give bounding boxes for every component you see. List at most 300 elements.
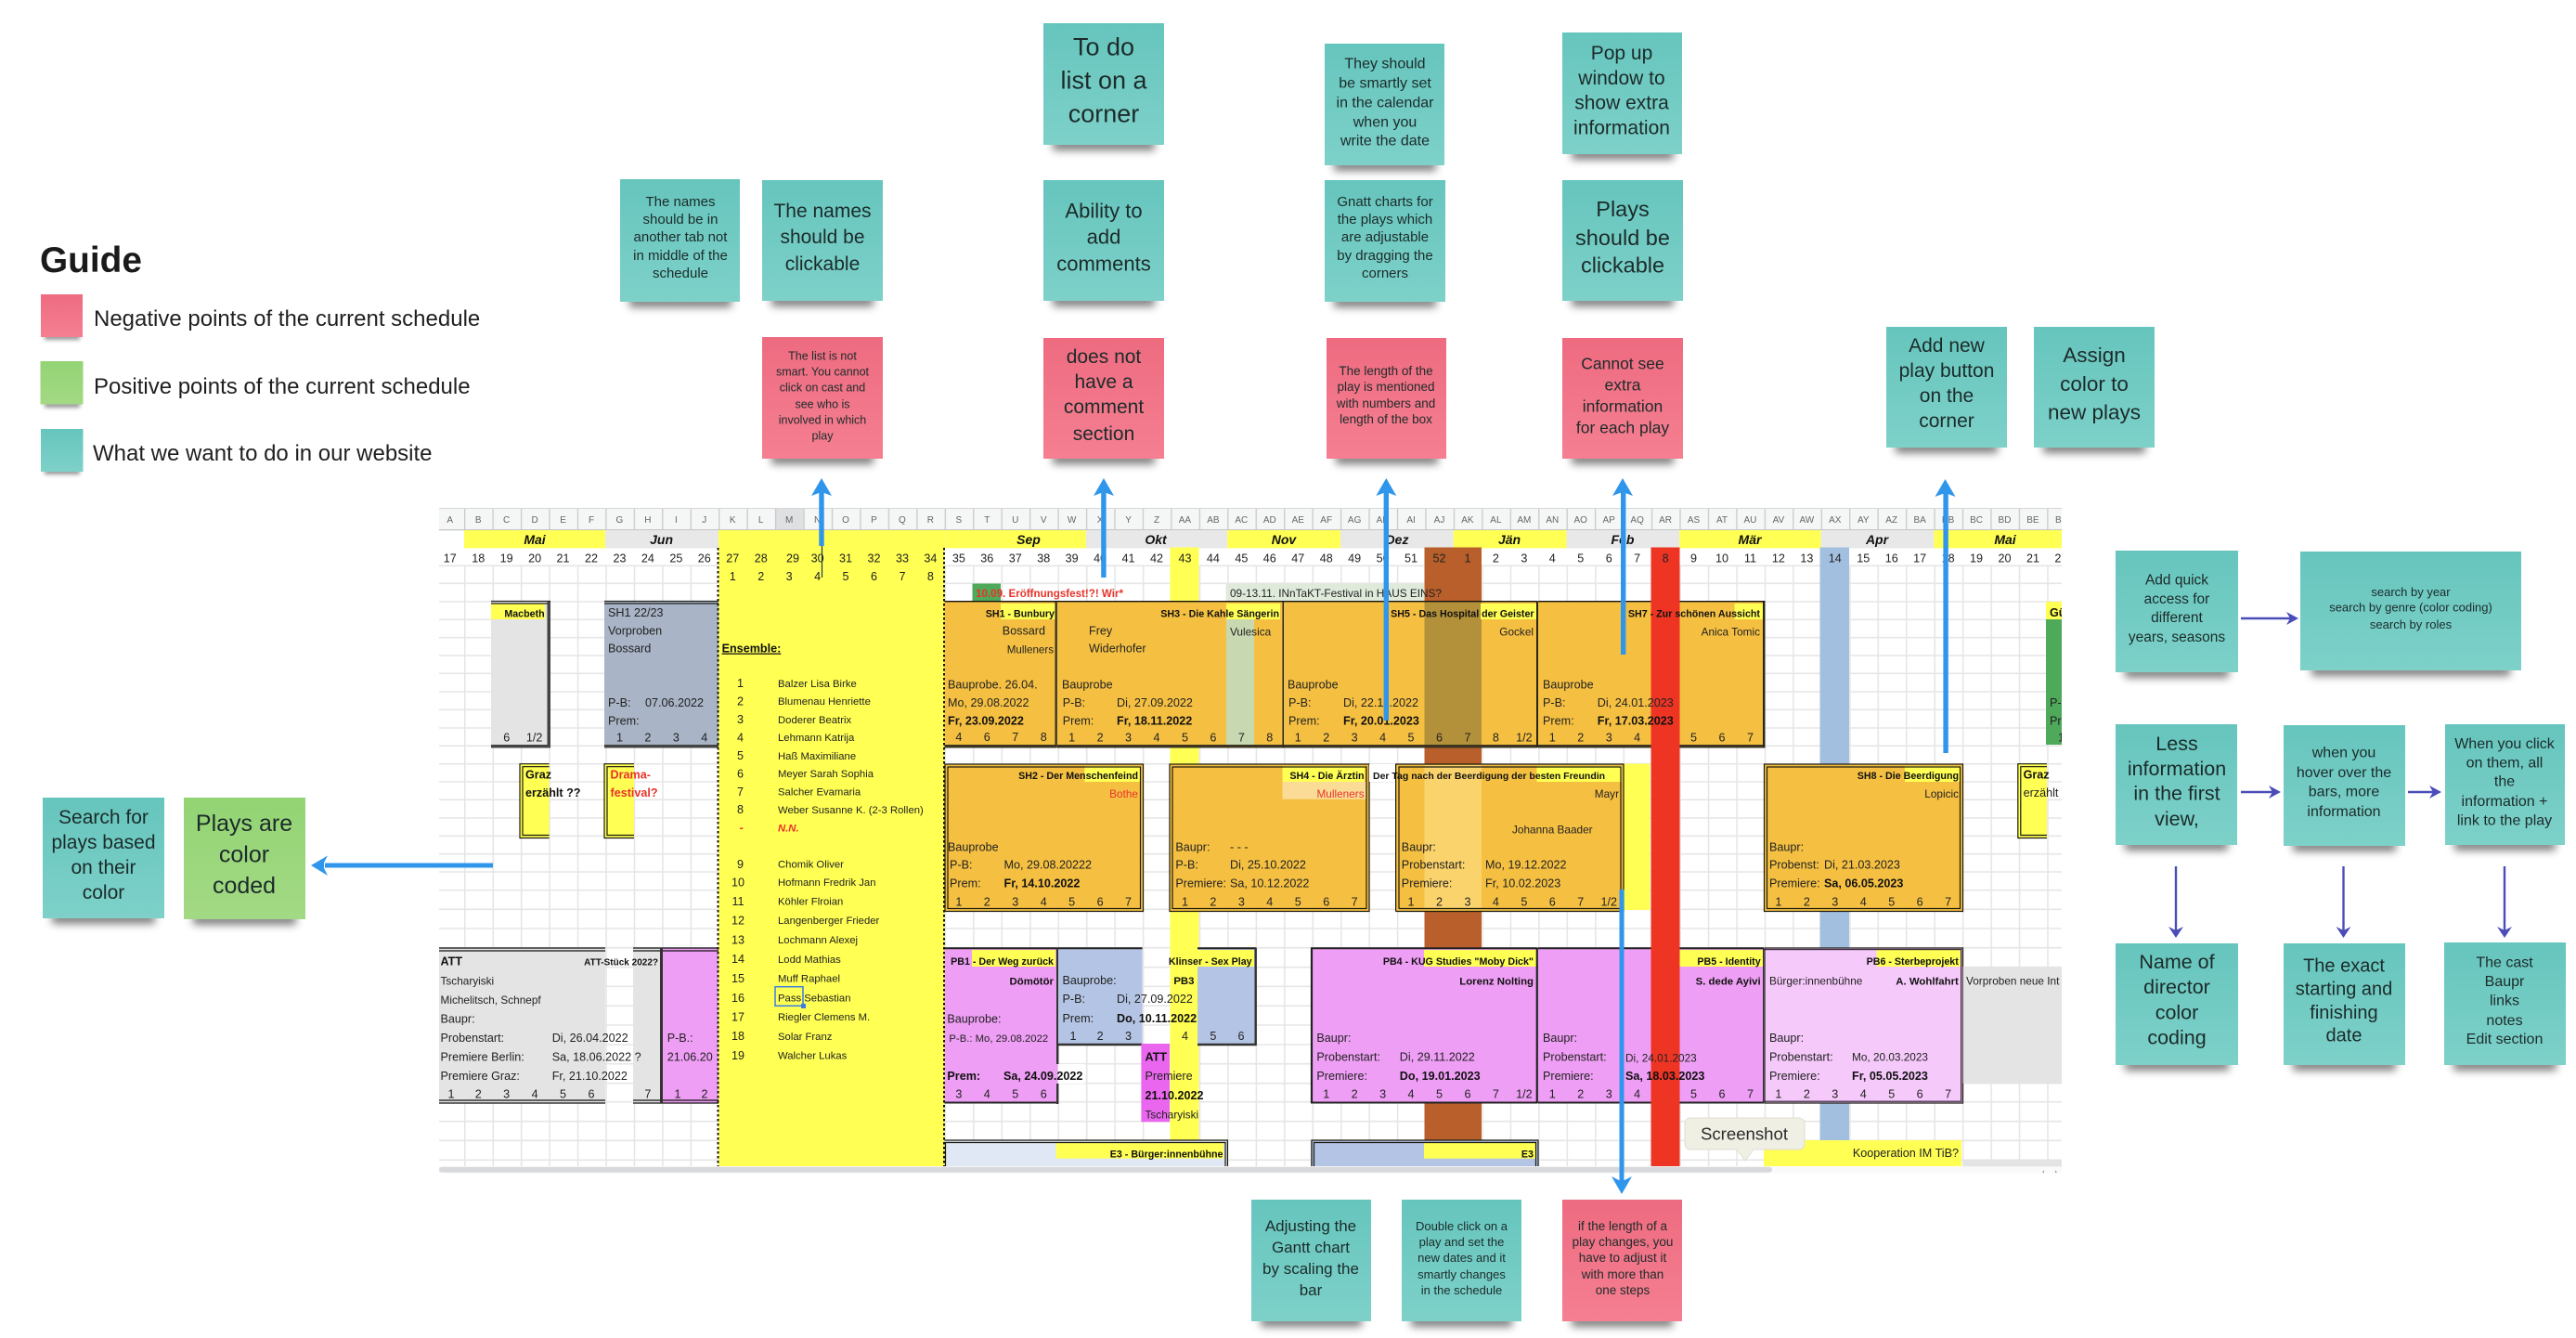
sticky: cast baupr links: Edit section	[2466, 1032, 2543, 1047]
ensemble cast list: Ensemble:	[722, 643, 781, 656]
box: pink P-B column: 1	[674, 1088, 681, 1101]
sticky: smartly set in calendar: be smartly set	[1339, 76, 1431, 91]
box: SH3 Die Kahle Sängerin: 4	[1153, 732, 1160, 745]
box: SH5 Das Hospital der Geister: Fr, 20.01.2023	[1343, 715, 1419, 728]
box: SH3 Die Kahle Sängerin: Di, 27.09.2022	[1117, 696, 1193, 709]
week numbers row: 3	[1521, 552, 1527, 565]
box: SH2 Der Menschenfeind: P-B:	[950, 858, 973, 871]
week numbers row: 20	[528, 552, 541, 565]
box: Vorproben neue Intendanz grey	[1963, 967, 2062, 1084]
box: PB6 Sterbeprojekt: PB6 - Sterbeprojekt	[1867, 956, 1959, 968]
box: SH8 Die Beerdigung: 6	[1917, 895, 1923, 908]
SH7 box text: 7	[1747, 732, 1754, 745]
box: Graz erzählt	[520, 764, 580, 838]
PB5 box text: Probenstart:	[1543, 1051, 1607, 1064]
box: Macbeth: 6	[503, 732, 510, 745]
legend	[40, 240, 480, 474]
box: PB4 KUG Studies Moby Dick: 7	[1493, 1088, 1499, 1101]
sticky: search by color: Search for	[58, 807, 149, 828]
box: ATT grey: 2	[475, 1088, 482, 1101]
box: PB3 Klinser Sex Play: PB3	[1173, 976, 1194, 987]
ensemble cast list: N.N.	[778, 823, 799, 834]
box: PB6 Sterbeprojekt: 1	[1775, 1088, 1781, 1101]
arrow: up to add new play sticky	[1935, 479, 1955, 753]
box: SH8 Die Beerdigung: Probenst:	[1769, 858, 1819, 871]
week numbers row: 46	[1263, 552, 1276, 565]
sticky: quick access: access for	[2144, 591, 2209, 607]
sticky: names clickable: clickable	[785, 253, 860, 275]
box: pink P-B column	[660, 948, 718, 1103]
ensemble cast list: 8	[927, 570, 934, 583]
box: PB6 Sterbeprojekt: Premiere:	[1769, 1070, 1820, 1083]
ensemble cast list: 12	[731, 914, 744, 927]
sticky: smartly set in calendar: write the date	[1340, 134, 1430, 149]
week numbers row: 40	[1094, 552, 1107, 565]
legend swatch: website	[41, 429, 84, 474]
sticky: smartly set in calendar: when you	[1353, 115, 1417, 130]
box: PB1 Der Weg zurück: P-B.: Mo, 29.08.2022	[949, 1033, 1048, 1045]
box: SH4 Die Ärztin: - - -	[1230, 841, 1249, 854]
box: ATT grey: Di, 26.04.2022	[552, 1032, 628, 1045]
sticky: names clickable: The names	[773, 201, 872, 222]
sticky: plays clickable: should be	[1575, 226, 1670, 250]
box: SH8 Die Beerdigung: 1	[1775, 895, 1781, 908]
sticky: no comment section	[1043, 338, 1164, 464]
column letters header: O	[842, 515, 849, 526]
column letters header: AB	[1207, 515, 1220, 526]
arrow: hover to click	[2408, 786, 2441, 799]
week numbers row: 14	[1829, 552, 1842, 565]
ensemble cast list: Lochmann Alexej	[778, 935, 858, 946]
ensemble cast list: 7	[737, 786, 744, 799]
box: PB4 KUG Studies Moby Dick: 5	[1436, 1088, 1443, 1101]
SH7 box text: 1	[1549, 732, 1556, 745]
sticky: name of director: Name of	[2139, 951, 2215, 973]
box: SH5 Das Hospital der Geister: P-B:	[1288, 696, 1311, 709]
ensemble cast list: Lodd Mathias	[778, 955, 841, 966]
legend swatch: negative	[41, 294, 83, 340]
week numbers row: 44	[1207, 552, 1220, 565]
sticky: to do list: list on a	[1060, 67, 1148, 95]
month header row: Mai	[524, 532, 547, 547]
ensemble cast list: 8	[737, 803, 744, 816]
week numbers row: 43	[1178, 552, 1191, 565]
box: PB6 Sterbeprojekt: 6	[1917, 1088, 1923, 1101]
PB5 box text: Premiere:	[1543, 1070, 1594, 1083]
week numbers row: 52	[1432, 552, 1446, 565]
box: ATT grey: 4	[532, 1088, 538, 1101]
box: ATT grey: ATT-Stück 2022?	[584, 958, 658, 968]
SH7 box text: Prem:	[1543, 715, 1574, 728]
sticky: search by color: on their	[71, 857, 136, 878]
box: ATT Premiere: Tscharyiski	[1146, 1109, 1198, 1122]
SH7 box text: Anica Tomic	[1702, 626, 1760, 639]
column letters header: AW	[1799, 515, 1815, 526]
box: SH5 Das Hospital der Geister: 8	[1493, 732, 1499, 745]
month header row: Jun	[650, 532, 673, 547]
column letters header: AZ	[1885, 515, 1897, 526]
box: PB3 Klinser Sex Play	[1058, 948, 1257, 1046]
SH7 box text: 6	[1718, 732, 1726, 745]
sticky: gantt charts: the plays which	[1338, 212, 1432, 227]
box: PB6 Sterbeprojekt: 7	[1945, 1088, 1951, 1101]
PB5 box text	[1543, 956, 1761, 1101]
column letters header: AN	[1546, 515, 1559, 526]
box: SH2 Der Menschenfeind	[945, 764, 1144, 912]
box: PB4 KUG Studies Moby Dick: Premiere:	[1316, 1070, 1367, 1083]
column letters header: Z	[1154, 515, 1159, 526]
sticky: less information: information	[2128, 758, 2226, 780]
sticky: names in another tab: schedule	[653, 266, 708, 281]
box: SH8 Die Beerdigung: Lopicic	[1924, 787, 1959, 800]
red week column	[1650, 548, 1680, 1166]
week numbers row: 15	[1857, 552, 1870, 565]
sticky: less information	[2116, 724, 2237, 851]
column letters header: BD	[1999, 515, 2011, 526]
arrow: quick access to search	[2241, 612, 2298, 625]
box: Graz erzählt: Graz	[525, 769, 551, 782]
ensemble cast list: 7	[899, 570, 905, 583]
box: Macbeth	[491, 602, 550, 748]
week numbers row: 30	[811, 552, 824, 565]
ensemble cast list: Haß Maximiliane	[778, 751, 856, 762]
box: PB4 KUG Studies Moby Dick	[1311, 948, 1537, 1103]
week numbers row: 18	[1942, 552, 1955, 565]
box: PB1 Der Weg zurück: 4	[984, 1088, 990, 1101]
box: SH1 22/23 Vorproben: 07.06.2022	[645, 696, 704, 709]
box: Der Tag nach der Beerdigung der besten Freundin: Premiere:	[1402, 877, 1452, 890]
sticky: hover	[2284, 725, 2405, 851]
box: Der Tag nach der Beerdigung der besten Freundin: 7	[1577, 895, 1584, 908]
ensemble cast list: 10	[731, 877, 744, 890]
week 8 label: 8	[1663, 552, 1669, 565]
sticky: less information: in the first	[2133, 782, 2220, 804]
sticky: search options: search by genre (color coding)	[2329, 600, 2492, 615]
box: SH4 Die Ärztin: Baupr:	[1175, 841, 1210, 854]
sticky: list is not smart	[762, 337, 883, 464]
box: Der Tag nach der Beerdigung der besten Freundin: Baupr:	[1402, 841, 1436, 854]
sticky: list is not smart: see who is	[795, 397, 850, 410]
sticky: ability to add comments	[1043, 180, 1164, 306]
box: SH4 Die Ärztin: 2	[1210, 895, 1216, 908]
sticky: ability to add comments: comments	[1056, 253, 1151, 275]
box: SH4 Die Ärztin: SH4 - Die Ärztin	[1289, 770, 1365, 782]
week numbers row: 12	[1772, 552, 1785, 565]
column letters header: AD	[1263, 515, 1276, 526]
box: SH4 Die Ärztin: 7	[1352, 895, 1358, 908]
sticky: adjusting gantt: Gantt chart	[1272, 1239, 1350, 1256]
box: PB3 Klinser Sex Play: Bauprobe:	[1062, 974, 1117, 987]
ensemble cast list: 13	[731, 934, 744, 947]
column letters header: AE	[1292, 515, 1304, 526]
column letters header: R	[927, 515, 934, 526]
sticky: plays clickable: Plays	[1596, 197, 1650, 221]
column letters header: BF	[2055, 515, 2067, 526]
box: SH1 22/23 Vorproben: 1	[616, 732, 623, 745]
box: SH4 Die Ärztin: Mulleners	[1316, 787, 1365, 800]
box: SH3 Die Kahle Sängerin: 8	[1266, 732, 1273, 745]
week numbers row: 19	[1970, 552, 1983, 565]
box: SH2 Der Menschenfeind: 7	[1125, 895, 1132, 908]
sticky: to do list	[1043, 23, 1164, 150]
week numbers row: 41	[1122, 552, 1135, 565]
box: pink P-B column: 21.06.20	[667, 1051, 713, 1064]
sticky: names in another tab	[620, 179, 740, 307]
column letters header: AK	[1461, 515, 1474, 526]
sticky: to do list: To do	[1073, 33, 1134, 61]
box: Kooperation IM TiB: Kooperation IM TiB?	[1853, 1147, 1959, 1160]
box: PB4 KUG Studies Moby Dick: 1/2	[1516, 1088, 1533, 1101]
sticky: click: information +	[2462, 794, 2547, 810]
ensemble cast list: 17	[731, 1010, 744, 1023]
column letters header: Y	[1125, 515, 1132, 526]
box: Der Tag nach der Beerdigung der besten Freundin: 6	[1549, 895, 1556, 908]
box: SH2 Der Menschenfeind: 4	[1041, 895, 1047, 908]
week numbers row: 24	[641, 552, 654, 565]
box: Kooperation IM TiB	[1764, 1140, 2062, 1166]
sticky: exact dates	[2284, 943, 2405, 1071]
box: SH1 Bunbury: Fr, 23.09.2022	[948, 715, 1024, 728]
sticky: quick access: Add quick	[2145, 572, 2208, 589]
week numbers row: 18	[472, 552, 485, 565]
box: PB4 KUG Studies Moby Dick: 3	[1379, 1088, 1386, 1101]
ensemble cast list: Blumenau Henriette	[778, 696, 871, 708]
box: SH4 Die Ärztin: 5	[1295, 895, 1301, 908]
week numbers row: 17	[1913, 552, 1926, 565]
box: Gü green	[2046, 602, 2062, 745]
box: Graz erzählt: erzählt ??	[525, 786, 580, 799]
box: Drama-festival	[604, 764, 658, 838]
sticky: double click: in the schedule	[1421, 1283, 1502, 1297]
arrow: down to director sticky	[2168, 866, 2183, 938]
box: PB4 KUG Studies Moby Dick: Baupr:	[1316, 1032, 1352, 1045]
box: SH1 22/23 Vorproben: SH1 22/23	[608, 606, 664, 619]
sticky: length changes: play changes, you	[1573, 1235, 1673, 1249]
box: SH1 22/23 Vorproben: Prem:	[608, 715, 640, 728]
column letters header: AC	[1235, 515, 1248, 526]
box: Der Tag nach der Beerdigung der besten Freundin: 5	[1521, 895, 1527, 908]
box: PB4 KUG Studies Moby Dick: 6	[1464, 1088, 1470, 1101]
ensemble cast list: Walcher Lukas	[778, 1051, 848, 1062]
SH7 box text: 4	[1634, 732, 1640, 745]
week numbers row: 5	[1577, 552, 1584, 565]
arrow: up to length sticky	[1376, 478, 1396, 721]
sticky: search by color: color	[83, 882, 124, 903]
sticky: cast baupr links: The cast	[2476, 955, 2533, 971]
ensemble cast list: Langenberger Frieder	[778, 916, 880, 927]
sticky: names in another tab: should be in	[643, 212, 718, 227]
box: PB1 Der Weg zurück: Prem:	[947, 1070, 980, 1083]
sticky: list is not smart: click on cast and	[780, 381, 865, 394]
box: PB4 KUG Studies Moby Dick: Probenstart:	[1316, 1051, 1380, 1064]
sticky: list is not smart: The list is not	[788, 349, 857, 362]
column letters header: M	[785, 515, 793, 526]
week numbers row: 2	[1493, 552, 1499, 565]
sticky: assign color	[2034, 327, 2155, 453]
ensemble cast list: 3	[737, 713, 744, 726]
box: PB3 Klinser Sex Play: 5	[1210, 1030, 1216, 1043]
ensemble cast list: Lehmann Katrija	[778, 733, 855, 744]
week numbers row: 6	[1606, 552, 1612, 565]
box: Gü green: P-B	[2050, 696, 2069, 709]
ensemble cast list: 15	[731, 972, 744, 985]
arrow: down to adjustment sticky	[1612, 890, 1632, 1194]
column letters header: AM	[1517, 515, 1531, 526]
box: SH5 Das Hospital der Geister: 7	[1464, 732, 1470, 745]
sticky: pop up window	[1562, 32, 1682, 160]
box: PB3 Klinser Sex Play: 1	[1069, 1030, 1077, 1043]
sticky: add new play button: on the	[1920, 385, 1974, 407]
sticky: cast baupr links: notes	[2486, 1013, 2523, 1029]
sticky: double click: Double click on a	[1416, 1219, 1508, 1233]
box: Der Tag nach der Beerdigung der besten Freundin: Mayr	[1595, 787, 1619, 800]
box: SH8 Die Beerdigung: 7	[1945, 895, 1951, 908]
box: SH2 Der Menschenfeind: Fr, 14.10.2022	[1004, 877, 1080, 890]
box: SH3 Die Kahle Sängerin: 1	[1068, 732, 1075, 745]
box: E3 second: E3	[1521, 1150, 1534, 1161]
box: SH3 Die Kahle Sängerin: Fr, 18.11.2022	[1117, 715, 1192, 728]
column letters header: E	[560, 515, 566, 526]
box: pink P-B column: P-B.:	[667, 1032, 693, 1045]
box: Der Tag nach der Beerdigung der besten Freundin: Der Tag nach der Beerdigung der besten Freundin	[1373, 771, 1605, 782]
week numbers row: 7	[1634, 552, 1640, 565]
column letters header: C	[503, 515, 510, 526]
column letters header: S	[956, 515, 963, 526]
column letters header: AQ	[1630, 515, 1644, 526]
sticky: names clickable: should be	[780, 227, 865, 248]
sticky: plays are color coded: Plays are	[196, 811, 292, 837]
ensemble cast list: Muff Raphael	[778, 973, 840, 984]
sticky: exact dates: starting and	[2296, 980, 2392, 1000]
box: ATT grey: Tscharyiski	[440, 975, 494, 988]
column letters header: P	[871, 515, 877, 526]
arrow: less info to hover	[2241, 786, 2281, 799]
event row: festivals: 10.09. Eröffnungsfest!?! Wir*	[976, 588, 1123, 600]
ensemble cast list: 14	[731, 953, 744, 966]
box: SH5 Das Hospital der Geister: 2	[1323, 732, 1329, 745]
month header row: Okt	[1145, 532, 1168, 547]
PB5 box text: 5	[1690, 1088, 1697, 1101]
box: SH3 Die Kahle Sängerin: 6	[1210, 732, 1216, 745]
highlighted calendar columns	[1170, 548, 1849, 1140]
box: Der Tag nach der Beerdigung der besten Freundin: 1	[1408, 895, 1415, 908]
box: SH8 Die Beerdigung: 4	[1860, 895, 1867, 908]
box: Der Tag nach der Beerdigung der besten Freundin: 3	[1464, 895, 1470, 908]
column letters header: H	[644, 515, 652, 526]
box: SH4 Die Ärztin	[1170, 764, 1369, 912]
sticky: cannot see extra information: for each play	[1576, 418, 1669, 436]
box: Gü green: Pr	[2050, 715, 2062, 728]
week numbers row: 1	[1464, 552, 1470, 565]
sticky: cast baupr links	[2444, 942, 2566, 1071]
column letters header: AR	[1659, 515, 1672, 526]
box: Der Tag nach der Beerdigung der besten Freundin: 4	[1493, 895, 1499, 908]
sticky: to do list: corner	[1068, 100, 1139, 128]
sticky: exact dates: finishing	[2310, 1003, 2378, 1023]
ensemble cast list	[722, 570, 934, 1062]
sticky: pop up window: Pop up	[1591, 43, 1652, 64]
arrow: up to extra information sticky	[1612, 478, 1633, 655]
ensemble cast list: 1	[730, 570, 736, 583]
legend text: positive: Positive points of the current schedule	[94, 374, 471, 399]
PB5 box text: 1	[1549, 1088, 1556, 1101]
PB5 box text: 3	[1606, 1088, 1612, 1101]
column letters header: BE	[2026, 515, 2039, 526]
box: SH8 Die Beerdigung: Baupr:	[1769, 841, 1804, 854]
sticky: name of director	[2116, 943, 2238, 1071]
box: SH3 Die Kahle Sängerin: P-B:	[1063, 696, 1085, 709]
month header row: Nov	[1272, 532, 1297, 547]
week numbers row: 37	[1009, 552, 1022, 565]
box: SH1 Bunbury: SH1 - Bunbury	[986, 609, 1055, 620]
column letters header: BC	[1970, 515, 1983, 526]
ensemble cast list: -	[740, 821, 744, 834]
box: SH1 Bunbury: Bauprobe. 26.04.	[948, 678, 1038, 691]
ensemble cast list: Doderer Beatrix	[778, 715, 851, 726]
box: SH1 Bunbury: 4	[955, 731, 962, 744]
box: ATT grey: Fr, 21.10.2022	[552, 1070, 628, 1083]
sticky: cannot see extra information	[1562, 338, 1683, 464]
box: SH7 Zur schönen Aussicht (fill)	[1538, 602, 1766, 748]
ensemble cast list: 2	[757, 570, 764, 583]
column letters header: AV	[1773, 515, 1785, 526]
box: PB6 Sterbeprojekt: Probenstart:	[1769, 1051, 1833, 1064]
PB5 box text: 6	[1718, 1088, 1726, 1101]
sticky: plays are color coded	[184, 798, 305, 925]
box: ATT grey	[439, 948, 662, 1103]
month header row: Dez	[1386, 532, 1408, 547]
box: SH5 Das Hospital der Geister: 1	[1295, 732, 1301, 745]
sticky: list is not smart: smart. You cannot	[776, 366, 870, 379]
PB5 box text: Baupr:	[1543, 1032, 1577, 1045]
column letters header	[439, 508, 2067, 530]
sticky: names clickable	[762, 180, 883, 306]
sticky: ability to add comments: add	[1087, 225, 1120, 249]
box: ATT Premiere: Premiere	[1146, 1070, 1193, 1083]
week numbers row: 38	[1037, 552, 1050, 565]
box: PB6 Sterbeprojekt: 3	[1832, 1088, 1838, 1101]
box: E3 second	[1311, 1140, 1538, 1166]
sticky: less information: view,	[2155, 808, 2199, 830]
sticky: click: on them, all	[2466, 756, 2543, 771]
ensemble yellow column	[718, 530, 945, 1166]
ensemble cast list: Hofmann Fredrik Jan	[778, 877, 875, 889]
week numbers row: 33	[896, 552, 909, 565]
PB5 box text: Di, 24.01.2023	[1625, 1051, 1697, 1064]
tooltip: Screenshot: Screenshot	[1701, 1124, 1789, 1144]
sticky: name of director: coding	[2147, 1027, 2207, 1049]
legend swatch: positive	[41, 361, 84, 408]
month header row: Feb	[1612, 532, 1635, 547]
box: Graz erzählt right: Graz	[2024, 769, 2050, 782]
column letters header: T	[984, 515, 990, 526]
sticky: gantt charts: corners	[1362, 266, 1408, 281]
box: Vorproben neue Intendanz grey: Vorproben neue Int	[1966, 975, 2060, 988]
week numbers row: 23	[613, 552, 626, 565]
week numbers row: 9	[1690, 552, 1697, 565]
box: PB1 Der Weg zurück	[945, 948, 1084, 1104]
column letters header: AA	[1179, 515, 1191, 526]
week numbers row: 17	[444, 552, 457, 565]
box: SH3 Die Kahle Sängerin	[1057, 602, 1285, 748]
box: SH5 Das Hospital der Geister: 1/2	[1516, 732, 1533, 745]
box: PB4 KUG Studies Moby Dick: 4	[1408, 1088, 1415, 1101]
sticky: gantt charts: Gnatt charts for	[1337, 194, 1433, 210]
sticky: ability to add comments: Ability to	[1065, 199, 1143, 223]
box: SH5 Das Hospital der Geister: 4	[1379, 732, 1386, 745]
SH7 box text: 5	[1690, 732, 1697, 745]
box: SH8 Die Beerdigung	[1764, 764, 1963, 912]
